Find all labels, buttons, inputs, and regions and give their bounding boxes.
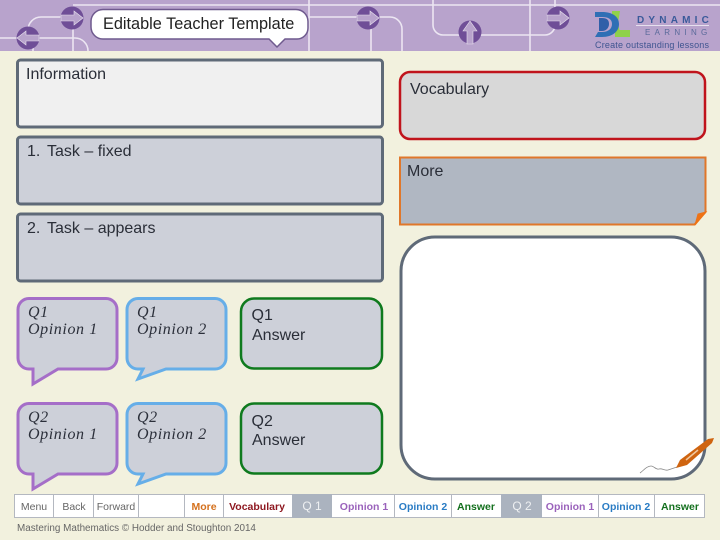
panel: task 2 xyxy=(18,214,382,281)
icon: right arrow button 3 xyxy=(546,6,570,30)
icon: pencil xyxy=(676,438,714,468)
panel: Q2 answer: Q2 xyxy=(252,413,273,430)
bubble: Q2 opinion 1: Opinion 1 xyxy=(28,426,98,443)
navigation bar: Opinion 2 xyxy=(399,501,447,513)
navigation bar: Vocabulary xyxy=(229,501,285,513)
bubble: Q1 opinion 2: Q1 xyxy=(137,304,158,321)
navigation bar: Opinion 2 xyxy=(602,501,650,513)
panel: task 2: 2. xyxy=(27,220,40,237)
bubble: Q2 opinion 1 xyxy=(18,404,117,489)
navigation bar: Forward xyxy=(97,501,135,513)
panel: Q2 answer: Answer xyxy=(252,432,306,449)
panel: Q1 answer: Answer xyxy=(252,327,306,344)
title speech bubble: Editable Teacher Template xyxy=(103,15,294,33)
bubble: Q1 opinion 1: Opinion 1 xyxy=(28,321,98,338)
icon: left arrow button xyxy=(16,26,40,50)
navigation bar: More xyxy=(191,501,217,513)
navigation bar xyxy=(14,494,704,518)
navigation bar: Answer xyxy=(457,501,495,513)
logo: Dynamic Learning xyxy=(595,11,713,50)
panel: task 1: 1. xyxy=(27,143,40,160)
panel: information: Information xyxy=(26,66,106,83)
pencil scribble xyxy=(640,466,677,473)
logo: Dynamic Learning: EARNING xyxy=(645,28,712,37)
icon: right arrow button xyxy=(60,6,84,30)
bubble: Q2 opinion 2: Opinion 2 xyxy=(137,426,207,443)
bubble: Q1 opinion 1 xyxy=(18,298,117,384)
navigation bar: Q 1 xyxy=(302,499,322,513)
logo: Dynamic Learning: DYNAMIC xyxy=(637,15,713,26)
navigation bar: Opinion 1 xyxy=(546,501,594,513)
navigation bar: Menu xyxy=(21,501,47,513)
bubble: Q2 opinion 2 xyxy=(127,404,226,484)
panel: large white answer area xyxy=(401,237,705,479)
bubble: Q2 opinion 2: Q2 xyxy=(137,409,158,426)
icon: right arrow button 2 xyxy=(356,6,380,30)
panel: task 1 xyxy=(18,137,382,204)
title speech bubble xyxy=(91,9,308,47)
panel: more: More xyxy=(407,163,444,180)
header band xyxy=(0,0,720,51)
navigation bar: Opinion 1 xyxy=(340,501,388,513)
navigation bar: Answer xyxy=(661,501,699,513)
panel: Q1 answer xyxy=(241,298,382,368)
bubble: Q1 opinion 1: Q1 xyxy=(28,304,49,321)
panel: Q2 answer xyxy=(241,404,382,474)
logo: Dynamic Learning: Create outstanding lessons xyxy=(595,40,710,50)
icon: up arrow button xyxy=(458,20,482,44)
navigation bar: Q 2 xyxy=(512,499,532,513)
panel: more xyxy=(400,158,706,225)
bubble: Q2 opinion 1: Q2 xyxy=(28,409,49,426)
bubble: Q1 opinion 2 xyxy=(127,298,226,379)
panel: vocabulary xyxy=(400,72,705,139)
panel: information xyxy=(18,60,382,127)
panel: task 1: Task – fixed xyxy=(47,143,131,160)
panel: vocabulary: Vocabulary xyxy=(410,81,489,98)
footer credit: Mastering Mathematics © Hodder and Stoughton 2014 xyxy=(17,523,256,534)
panel: task 2: Task – appears xyxy=(47,220,156,237)
bubble: Q1 opinion 2: Opinion 2 xyxy=(137,321,207,338)
navigation bar: Back xyxy=(62,501,86,513)
panel: Q1 answer: Q1 xyxy=(252,307,273,324)
